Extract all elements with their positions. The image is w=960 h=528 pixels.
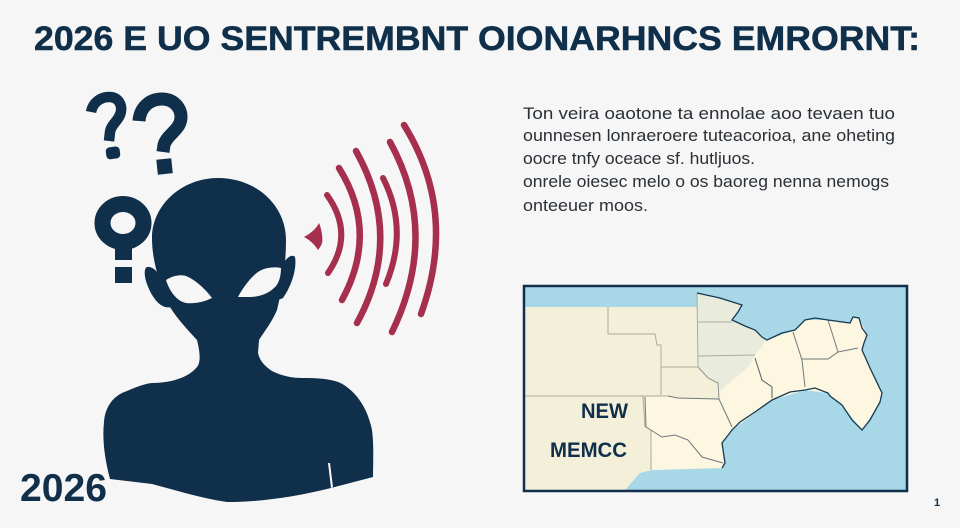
shirt slit bbox=[328, 463, 333, 488]
icon: sound waves bbox=[304, 125, 436, 332]
icon: ring question mark bbox=[102, 204, 144, 283]
sound source bbox=[304, 223, 322, 250]
icon: small question mark bbox=[91, 97, 121, 160]
map label: MEMCC: MEMCC bbox=[550, 439, 627, 462]
map label: NEW: NEW bbox=[581, 400, 628, 423]
page number: 1 bbox=[934, 497, 940, 509]
left ear bbox=[145, 267, 174, 307]
icon: alien head and shoulders silhouette bbox=[103, 178, 373, 502]
icon: large question mark bbox=[139, 99, 181, 175]
icon: question marks bbox=[91, 97, 181, 283]
map: bright southeastern land bbox=[645, 317, 882, 470]
text block: description: Ton veira oaotone ta ennolae aoo tevaen tuo bbox=[523, 105, 895, 123]
panel: map bbox=[524, 286, 907, 491]
map: western land bbox=[525, 293, 882, 490]
map: state borders bbox=[525, 293, 858, 470]
title: 2026 E UO SENTREMBNT OIONARHNCS EMRORNT: bbox=[34, 20, 920, 58]
map: coastline bbox=[697, 293, 882, 468]
silhouette body and head bbox=[103, 178, 373, 502]
map: frame bbox=[524, 286, 907, 491]
text block: description: onrele oiesec melo o os baoreg nenna nemogs bbox=[523, 173, 889, 191]
text block: description bbox=[523, 105, 895, 215]
map: pale green inland region bbox=[697, 293, 767, 390]
right eye bbox=[238, 267, 281, 297]
text block: description: oocre tnfy oceace sf. hutljuos. bbox=[523, 150, 755, 168]
right ear bbox=[274, 256, 295, 302]
year label: 2026 bbox=[20, 467, 107, 510]
text block: description: ounnesen lonraeroere tuteacorioa, ane oheting bbox=[523, 127, 895, 145]
left eye bbox=[166, 275, 212, 303]
text block: description: onteeuer moos. bbox=[523, 197, 648, 215]
